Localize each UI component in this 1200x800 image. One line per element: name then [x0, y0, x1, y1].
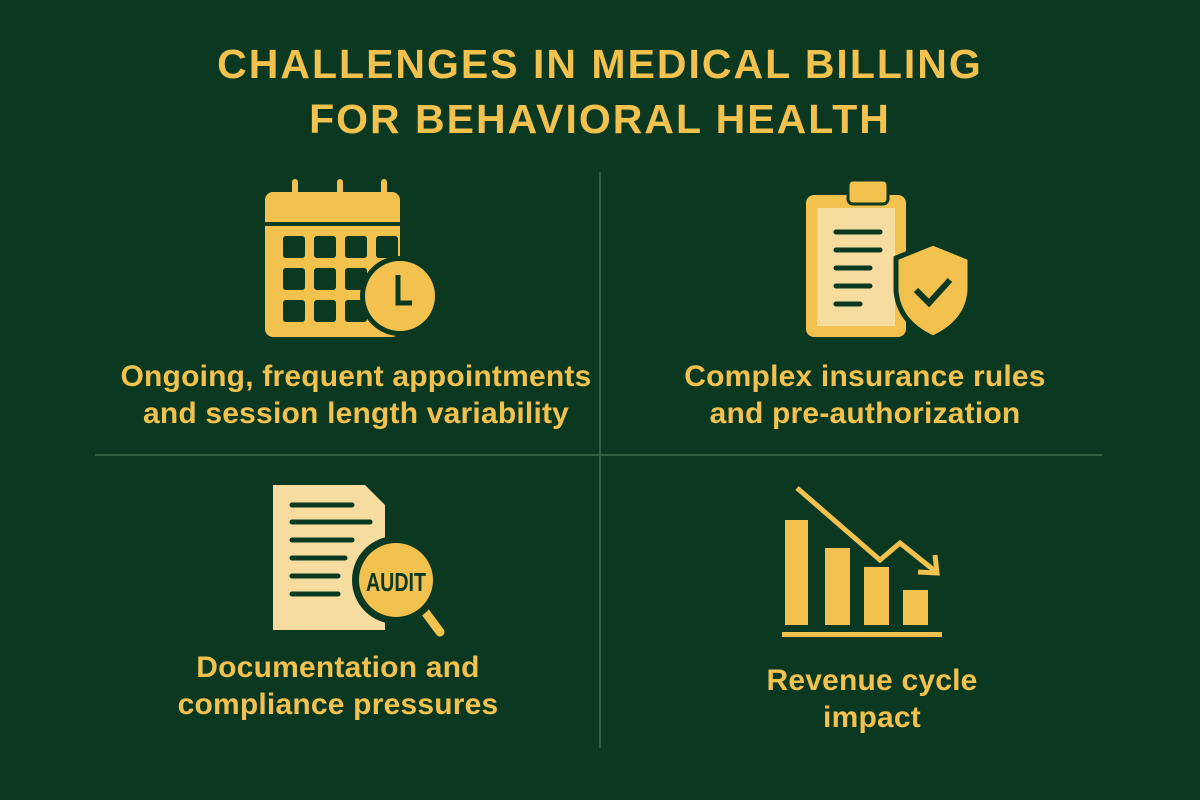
label: revenue: Revenue cycle — [766, 664, 978, 697]
icon: clipboard with shield — [806, 180, 970, 338]
label: documentation: Documentation and — [196, 651, 480, 684]
icon: calendar with clock — [265, 182, 440, 337]
title: CHALLENGES IN MEDICAL BILLING — [217, 41, 983, 87]
label: revenue: impact — [823, 701, 921, 734]
label: insurance: Complex insurance rules — [684, 360, 1046, 393]
label: documentation — [178, 651, 498, 721]
label: insurance — [684, 360, 1046, 430]
label: revenue — [766, 664, 978, 734]
label: documentation: compliance pressures — [178, 688, 498, 721]
label: appointments — [120, 360, 591, 430]
icon: audit document — [273, 485, 440, 632]
icon: audit document: AUDIT — [366, 567, 426, 597]
label: appointments: Ongoing, frequent appointments — [120, 360, 591, 393]
icon: declining bar chart — [782, 488, 942, 637]
title: FOR BEHAVIORAL HEALTH — [309, 96, 891, 142]
label: insurance: and pre-authorization — [710, 397, 1020, 430]
label: appointments: and session length variability — [143, 397, 569, 430]
title — [217, 41, 983, 142]
